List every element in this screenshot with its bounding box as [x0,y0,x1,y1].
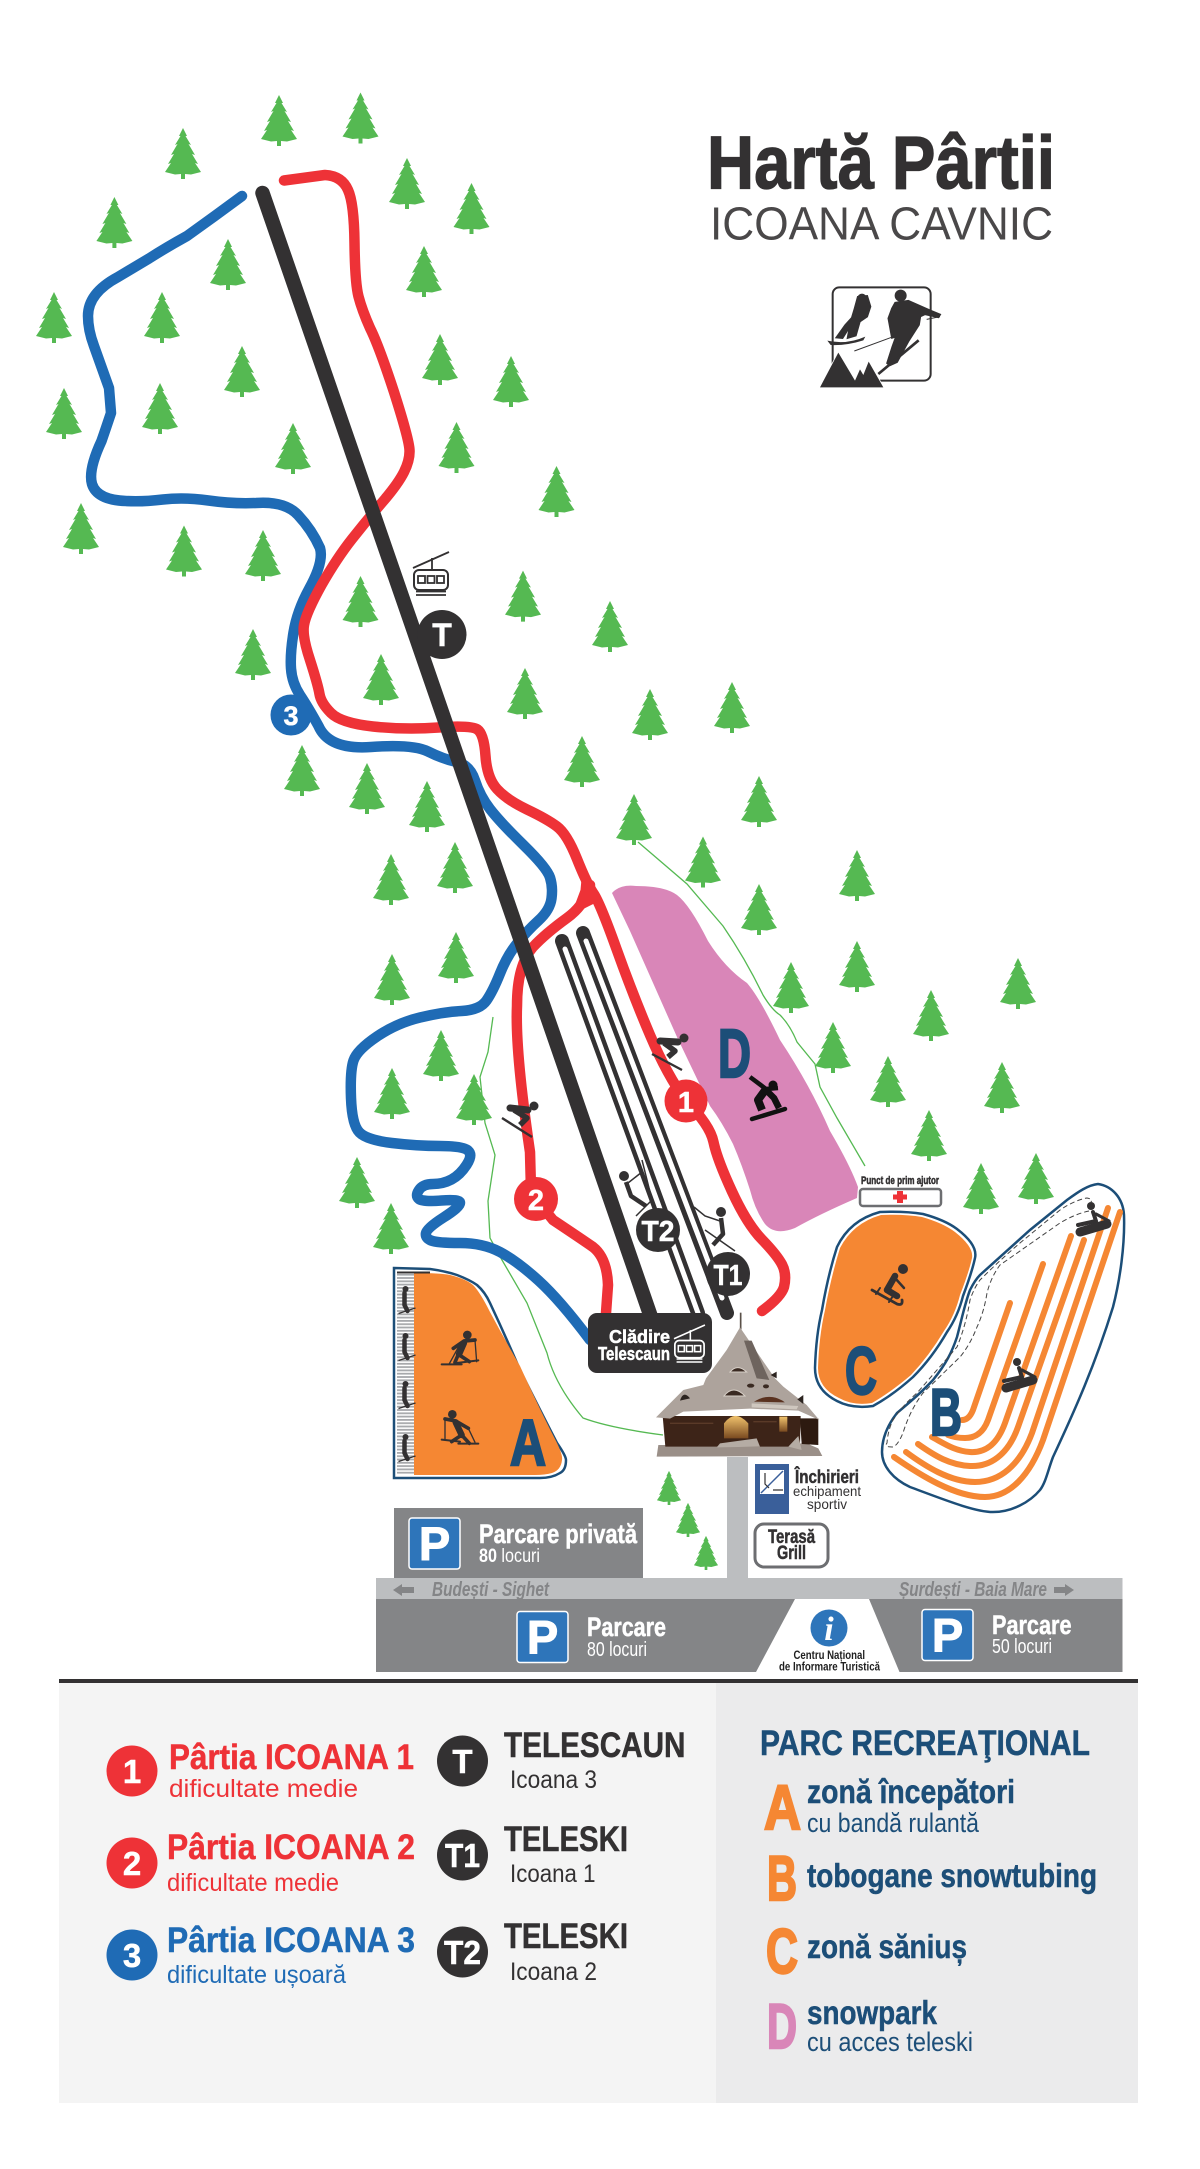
legend: trail 2: dificultate medie [167,1869,339,1897]
lift marker T2: T2 [642,1216,674,1248]
legend: zone D [767,1992,973,2062]
zone D: snowpark [612,886,858,1231]
zone C: sledding [815,1212,975,1409]
lift marker T [418,610,466,659]
rider on teleski T1 [694,1207,735,1251]
legend: chairlift T: Icoana 3 [510,1766,597,1794]
grill terrace sign [755,1524,828,1567]
main parking right: 50 locuri [992,1636,1052,1658]
private parking [394,1508,643,1578]
tourist information: de Informare Turistică [779,1660,880,1674]
legend: chairlift T: TELESCAUN [504,1726,686,1765]
legend: trail 2: Pârtia ICOANA 2 [167,1828,415,1867]
legend: chairlift T: T [452,1743,473,1780]
legend: trail 1: dificultate medie [169,1775,358,1803]
zone D: snowpark: D [718,1015,751,1092]
legend: ski lift T1: T1 [445,1837,480,1874]
teleski lines T1 and T2 [562,933,727,1313]
legend: chairlift T [437,1726,686,1794]
red trail Icoana 2 [517,868,608,1313]
road with directions [376,1578,1122,1601]
legend: ski lift T1 [437,1820,628,1888]
legend: ski lift T1: TELESKI [504,1820,628,1859]
trail marker 3 [270,694,312,736]
main parking left: Parcare [587,1612,666,1642]
grill terrace sign: Terasă [768,1527,815,1548]
legend: zone A: A [764,1773,801,1843]
heading: recreational park: PARC RECREAŢIONAL [760,1724,1090,1763]
skier on trail 2 [502,1102,538,1137]
rental sign: echipament [793,1483,861,1499]
lift marker T2 [636,1208,680,1252]
green boundary lines [480,842,865,1435]
title [707,120,1055,250]
trail marker 2 [514,1177,558,1221]
snowboarder on zone D [750,1077,785,1119]
legend: trail 3 [106,1921,415,1989]
legend: trail 2: 2 [123,1845,141,1882]
title: Hartă Pârtii [707,120,1055,204]
skier on trail 1 [652,1034,688,1070]
zone B: snowtubing runs: B [930,1375,962,1449]
legend: ski lift T2 [437,1917,628,1986]
title: ICOANA CAVNIC [710,198,1053,250]
legend: zone D: snowpark [807,1994,938,2031]
tourist information: i [824,1611,834,1648]
road with directions: Budești - Sighet [432,1579,550,1601]
legend: trail 1: Pârtia ICOANA 1 [169,1738,414,1777]
legend: ski lift T2: TELESKI [504,1917,628,1956]
chairlift line T [262,193,652,1320]
legend: zone C: C [766,1917,798,1987]
main parking left [376,1599,795,1672]
legend: ski lift T2: T2 [444,1934,481,1971]
icon: gondola near T [413,552,449,595]
illustration: main lodge building [656,1313,822,1457]
trail marker 1: 1 [678,1087,694,1119]
legend: zone A [764,1773,1015,1843]
legend: zone D: D [767,1992,797,2062]
trail marker 1 [664,1080,708,1122]
legend: ski lift T1: Icoana 1 [510,1860,596,1888]
legend: zone B [767,1844,1097,1914]
zone A: beginners with conveyor: A [510,1406,546,1479]
private parking: 80 locuri [479,1546,540,1567]
icon: resort logo with skier and snowboarder [820,287,941,387]
tourist information [779,1610,880,1674]
zone B: snowtubing runs [882,1184,1124,1512]
blue trail Icoana 3 [88,196,590,1340]
red trail Icoana 1 [284,175,785,1311]
chairlift building label: Telescaun [598,1344,670,1364]
grill terrace sign: Grill [777,1543,806,1564]
legend: zone B: B [767,1844,797,1914]
legend: zone B: tobogane snowtubing [807,1857,1097,1894]
lift marker T1 [706,1252,750,1296]
lift marker T: T [432,617,452,653]
legend: zone A: cu bandă rulantă [807,1808,980,1838]
legend: trail 3: Pârtia ICOANA 3 [167,1921,415,1960]
rider on teleski T2 [619,1160,652,1216]
legend divider [59,1679,1138,1683]
zone C: sledding: C [845,1334,877,1409]
trees [36,92,1054,1570]
legend panel: recreational park [716,1683,1138,2103]
legend: trail 3: 3 [123,1937,141,1974]
rental sign: Închirieri [794,1466,859,1487]
legend: ski lift T2: Icoana 2 [510,1958,597,1986]
trail marker 2: 2 [528,1185,544,1217]
trail marker 3: 3 [283,701,299,731]
legend: zone C [766,1917,967,1987]
first aid point: Punct de prim ajutor [861,1175,940,1187]
legend: trail 1: 1 [123,1753,141,1790]
legend: trail 3: dificultate ușoară [167,1961,346,1989]
tourist information: Centru Național [794,1648,865,1662]
legend: trail 1 [106,1738,414,1803]
chairlift building label: Clădire [609,1327,670,1347]
zone A: beginners with conveyor [394,1268,566,1479]
vertical access road [727,1457,748,1579]
legend: zone D: cu acces teleski [807,2027,973,2057]
road with directions: Șurdești - Baia Mare [899,1579,1047,1601]
legend: zone A: zonă începători [807,1773,1015,1810]
rental sign [755,1464,861,1514]
main parking right: Parcare [992,1610,1072,1640]
legend: zone C: zonă săniuș [807,1928,967,1966]
rental sign: sportiv [807,1496,847,1512]
main parking left: 80 locuri [587,1639,647,1661]
lift marker T1: T1 [714,1260,742,1292]
legend: trail 2 [106,1828,415,1897]
first aid point [860,1175,941,1206]
legend panel: trails and lifts [59,1683,716,2103]
private parking: Parcare privată [479,1519,638,1549]
main parking right [869,1599,1122,1672]
chairlift building label [588,1313,712,1373]
